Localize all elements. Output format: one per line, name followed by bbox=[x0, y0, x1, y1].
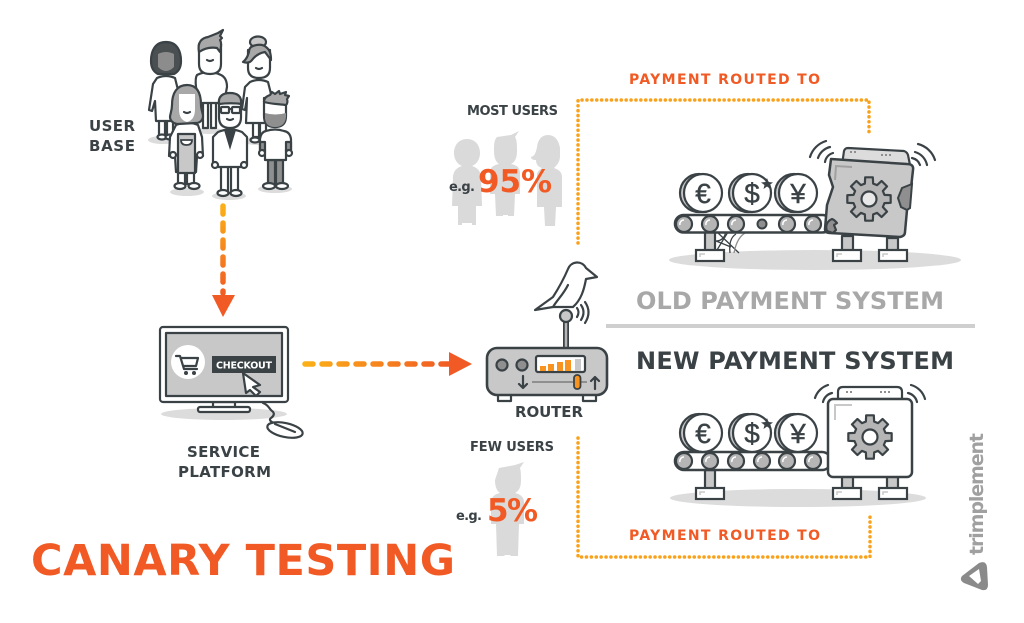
illustration: user group bbox=[148, 30, 292, 200]
arrow: service platform to router bbox=[305, 352, 472, 376]
chart: signal level bars bbox=[536, 356, 585, 372]
coins: ¥ bbox=[789, 178, 806, 209]
silhouette: few users bbox=[491, 462, 524, 556]
coins: € bbox=[695, 178, 711, 209]
stat: 95 percent: 95% bbox=[478, 164, 552, 200]
machine legs and feet bbox=[833, 476, 907, 499]
conveyor stand bbox=[696, 470, 724, 499]
coins: ¥ bbox=[789, 418, 806, 449]
person: woman with apron bbox=[169, 85, 203, 189]
icon: brand logo bbox=[961, 562, 988, 590]
icon: bird bbox=[535, 262, 597, 310]
arrow: user base to service platform bbox=[212, 206, 235, 317]
conveyor belt bbox=[675, 452, 831, 470]
stat: 95 percent: e.g. bbox=[449, 180, 475, 195]
damaged machine box bbox=[825, 148, 913, 237]
dotted line: route to old system bbox=[578, 100, 869, 243]
heading: new payment system: NEW PAYMENT SYSTEM bbox=[636, 347, 954, 375]
title: CANARY TESTING bbox=[31, 536, 455, 586]
heading: service platform: PLATFORM bbox=[178, 463, 271, 481]
label: payment routed to (new): PAYMENT ROUTED TO bbox=[629, 528, 820, 544]
person: woman with bun bbox=[242, 36, 272, 142]
icon: mouse bbox=[263, 403, 304, 441]
person: man in suit bbox=[212, 93, 247, 196]
heading: user base: USER bbox=[89, 117, 135, 135]
dotted line: route to new system bbox=[578, 438, 870, 557]
button: checkout: CHECKOUT bbox=[216, 360, 273, 372]
heading: service platform: SERVICE bbox=[187, 443, 260, 461]
divider bbox=[606, 324, 975, 328]
person: bearded man bbox=[259, 91, 292, 189]
stat: 5 percent bbox=[456, 493, 538, 529]
brand wordmark: trimplement bbox=[966, 433, 988, 555]
label: most users: MOST USERS bbox=[467, 104, 558, 119]
illustration: router with bird bbox=[487, 262, 607, 401]
coins bbox=[680, 414, 817, 452]
slider control bbox=[519, 375, 599, 389]
stat: 5 percent: e.g. bbox=[456, 509, 482, 524]
person: man with quiff bbox=[196, 30, 227, 128]
vibration lines bbox=[815, 385, 925, 402]
illustration: service platform monitor bbox=[160, 327, 304, 441]
coins: € bbox=[695, 418, 711, 449]
conveyor belt bbox=[675, 215, 831, 232]
stat: 5 percent: 5% bbox=[487, 493, 538, 529]
heading: old payment system: OLD PAYMENT SYSTEM bbox=[636, 287, 944, 315]
coins bbox=[680, 174, 817, 212]
icon: cursor bbox=[243, 373, 260, 396]
silhouettes: most users bbox=[452, 131, 562, 226]
conveyor stand with cobweb bbox=[696, 232, 747, 261]
person: dark-haired woman bbox=[149, 42, 181, 140]
illustration: old payment system machine bbox=[669, 141, 961, 270]
coins: $ bbox=[744, 418, 760, 449]
vibration lines bbox=[810, 141, 935, 165]
coins: $ bbox=[744, 178, 760, 209]
label: router: ROUTER bbox=[515, 403, 583, 421]
label: payment routed to (old): PAYMENT ROUTED TO bbox=[629, 72, 820, 88]
heading: user base: BASE bbox=[89, 137, 135, 155]
button: checkout bbox=[212, 356, 276, 373]
illustration: new payment system machine bbox=[670, 385, 926, 507]
machine box bbox=[828, 387, 912, 477]
icon: shopping cart bbox=[171, 345, 205, 379]
machine legs and feet bbox=[833, 236, 907, 261]
label: few users: FEW USERS bbox=[470, 440, 554, 455]
